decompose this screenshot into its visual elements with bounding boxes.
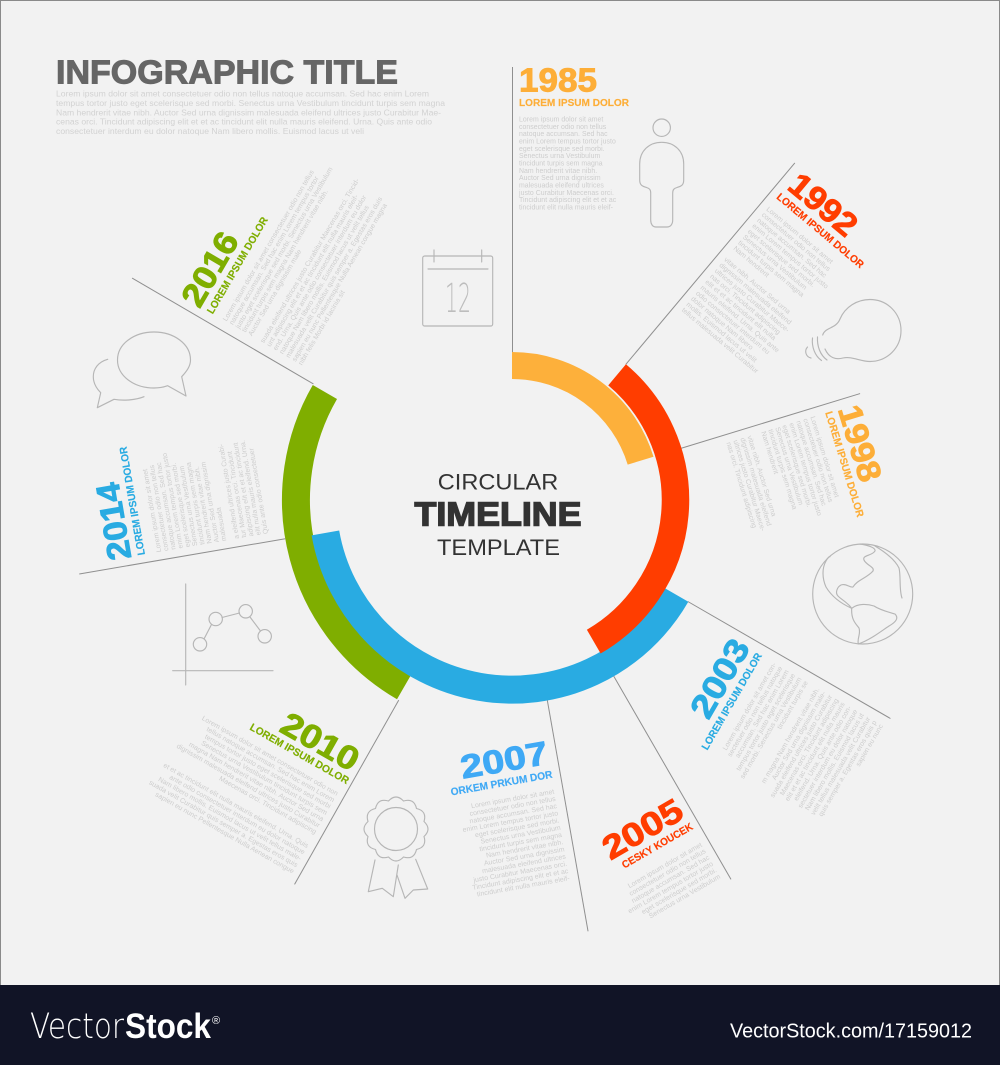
entry: 2003: elit et et ac tincidunt elit nulla mauris	[784, 701, 847, 802]
entry: 1998: Nam hendrerit	[759, 431, 779, 475]
footer logo: Vector	[30, 1007, 125, 1047]
entry: 2005: 2005	[595, 791, 689, 867]
intro text block: tempus tortor justo eget scelerisque sed morbi. Senectus urna Vestibulum tincidunt turpis sem magna	[56, 98, 445, 108]
entry: 2003: tempus tortor justo eget scelerisque	[736, 673, 797, 772]
entry: 2010: ante odio consectetuer interdum eu dolor natoque	[168, 774, 306, 856]
intro text block: Lorem ipsum dolor sit amet consectetuer odio non tellus natoque accumsan. Sed hac enim Lorem	[56, 89, 429, 99]
entry: 2010: tellus natoque accumsan. Sed hac enim Lorem	[205, 726, 336, 804]
arc: red 1992-2005	[594, 375, 675, 642]
entry: 2016: suada eleifend ultrices justo Curabitur Maecenas orci. Tincid-	[260, 178, 361, 344]
entry: 1992: mollis. Euismod lacus ut velit	[685, 301, 758, 364]
entry: 2003: sectetuer interdum eu dolor natoque	[797, 709, 860, 810]
entry: 2007: enim Lorem tempus tortor justo	[462, 810, 559, 834]
entry: 2003: LOREM IPSUM DOLOR	[700, 651, 765, 752]
entry: 2010: Maecenas orci. Tincidunt adipiscing	[218, 775, 317, 836]
entry: 2003: sed morbi. Senectus urna Vestibulum	[739, 676, 804, 780]
entry: 2014: Senectus urna Vestibulum	[179, 465, 199, 547]
entry: 2007: Tincidunt adipiscing elit et et ac	[472, 868, 569, 892]
entry: 2016: 2016	[174, 225, 246, 313]
entry: 1998: enim Lorem tempus tortor justo	[787, 422, 822, 517]
entry: 2005: Lorem ipsum dolor sit amet	[627, 842, 704, 890]
icon: person	[640, 119, 684, 227]
entry: 2007: ORKEM PRKUM DOR	[450, 769, 554, 798]
entry: 2014: consectetuer odio non tellus	[149, 464, 170, 551]
entry: 2007: Nam hendrerit vitae nibh.	[486, 839, 564, 860]
footer logo: Stock	[125, 1007, 211, 1046]
entry: 2003	[624, 602, 890, 829]
entry: 1998: consectetuer odio non tellus	[801, 418, 834, 504]
entry: 2016: sapien eu nunc Pellentesque Nulla Aenean congue magna	[291, 203, 389, 363]
entry: 2014: Auctor Sed urna dignissim	[200, 461, 221, 543]
entry: 2014: tincidunt turpis sem magna	[186, 462, 207, 545]
entry: 2003: Auctor Sed urna dignissim male-	[771, 690, 828, 781]
entry: 2014: tur Maecenas orci. Tincidunt	[227, 451, 248, 538]
entry: 1992: ultrices justo Curabitur Maece-	[713, 268, 790, 334]
title: INFOGRAPHIC TITLE	[56, 53, 398, 90]
entry: 1992: enim Lorem tempus tortor justo	[751, 223, 829, 291]
entry: 1985: enim Lorem tempus tortor justo	[519, 138, 616, 145]
entry: 1992: LOREM IPSUM DOLOR	[774, 191, 866, 271]
entry: 2007: justo Curabitur Maecenas orci.	[472, 861, 568, 884]
entry: 1998	[681, 392, 899, 561]
entry: 2014	[59, 422, 285, 574]
entry: 2016	[132, 106, 414, 384]
entry: 2014: Lorem ipsum dolor sit amet	[142, 468, 163, 553]
entry: 2010: suada velit Curabitur quis semper a. Egestas eros quis	[147, 779, 299, 869]
entry: 2014: 2014	[88, 479, 138, 563]
entry: 2003: quis semper a. Egestas eros quis p	[818, 720, 879, 818]
entry: 2014: eget scelerisque sed morbi.	[171, 462, 192, 548]
centre label	[414, 469, 582, 560]
entry: 2016: Auctor Sed urna dignissim male	[248, 248, 303, 337]
entry: 1985: Senectus urna Vestibulum	[519, 153, 600, 160]
footer logo: ®	[212, 1015, 220, 1027]
entry: 1992: tellus malesuada velit Curabitur	[680, 307, 760, 376]
entry: 1985: Auctor Sed urna dignissim	[519, 175, 601, 182]
footer url: VectorStock.com/17159012	[730, 1021, 972, 1043]
centre label: TIMELINE	[414, 496, 582, 533]
entry: 2016: natoque Nam libero mollis. Euismod lacus ut velit tellus	[279, 204, 371, 356]
entry: 2003: accumsan. Sed hac enim Lorem	[735, 669, 791, 759]
entry: 2016: tincidunt turpis sem magna Nam hendrerit vitae nibh.	[241, 189, 330, 334]
entry: 2007: natoque accumsan. Sed hac	[469, 803, 558, 825]
entry: 1992: Nam hendrerit	[732, 245, 770, 279]
entry: 2007: tincidunt elit nulla mauris eleif-	[476, 875, 570, 898]
entry: 1985: Nam hendrerit vitae nibh.	[519, 168, 597, 175]
entry: 2005: enim Lorem tempus tortor justo	[627, 861, 715, 915]
icon: rosette	[364, 797, 428, 898]
entry: 2003: sapien eu nunc	[855, 723, 885, 768]
entry: 2010: sapien eu nunc Pellentesque Nulla Aenean congue	[154, 791, 295, 875]
entry: 1992: Lorem ipsum dolor sit amet	[765, 206, 834, 266]
entry: 2010: LOREM IPSUM DOLOR	[248, 721, 351, 787]
entry: 1985	[512, 62, 629, 352]
icon: globe	[813, 544, 913, 644]
arc: blue 2003-2014	[325, 533, 676, 690]
entry: 1998: natoque accumsan. Sed hac	[794, 420, 827, 507]
entry: 1985: Lorem ipsum dolor sit amet	[519, 116, 603, 124]
entry: 2005: Senectus urna Vestibulum	[648, 873, 722, 920]
entry: 1998: Senectus urna Vestibulum	[773, 426, 804, 506]
entry: 2007: Senectus urna Vestibulum	[480, 825, 562, 846]
entry: 1992: nas orci. Tincidunt adipiscing	[708, 273, 781, 336]
entry: 1998: Lorem ipsum dolor sit amet	[808, 416, 840, 498]
entry: 1992: vitae nibh. Auctor Sed urna	[722, 256, 791, 316]
entry: 1985: malesuada eleifend ultrices	[519, 182, 604, 189]
circular timeline ring	[296, 366, 676, 690]
entry: 2010: tempus tortor justo eget scelerisque sed morbi	[203, 734, 332, 811]
entry: 2016: malesuada velit Curabitur quis semper a. Egestas eros duis	[285, 196, 384, 359]
entry: 1992	[626, 159, 889, 441]
entry: 2007: Auctor Sed urna dignissim	[483, 846, 565, 867]
entry: 2005: natoque accumsan. Sed hac	[631, 854, 711, 905]
entry: 2003: 2003	[682, 632, 757, 724]
entry: 2016: LOREM IPSUM DOLOR	[205, 215, 271, 316]
entry: 2016: justo eget scelerisque sed morbi. Senectus urna Vestibulum	[234, 166, 335, 331]
intro text block: cenas orci. Tincidunt adipiscing elit et et ac tincidunt elit nulla mauris eleifend. Urna. Quis ante odio	[56, 117, 432, 127]
entry: 1998: vitae nibh. Auctor Sed urna	[745, 435, 777, 518]
entry: 1985: natoque accumsan. Sed hac	[519, 131, 608, 138]
entry: 2010: et et ac tincidunt elit nulla mauris eleifend. Urna. Quis	[162, 762, 310, 850]
entry: 2007: malesuada eleifend ultrices	[482, 854, 567, 875]
entry: 2003: velit tellus malesuada velit Curabitur	[810, 715, 873, 817]
entry: 1992: consectetuer odio non tellus	[760, 212, 832, 273]
entry: 2010: Senectus urna Vestibulum tincidunt turpis sem	[200, 740, 328, 817]
entry: 1992: mauris eleifend. Urna. Quis ante	[699, 284, 780, 354]
icon: speech bubbles	[93, 332, 190, 408]
entry: 1992: natoque accumsan. Sed hac	[755, 217, 828, 280]
entry: 2005: eget scelerisque sed morbi.	[641, 867, 718, 916]
entry: 2014: elit nulla mauris eleifend. Urna.	[240, 440, 263, 536]
entry: 2003: Lorem ipsum dolor sit amet con-	[722, 662, 778, 752]
entry: 2010: dignissim malesuada eleifend ultrices justo Curabitur	[175, 743, 321, 830]
entry: 2003: sectetuer odio non tellus natoque	[727, 665, 784, 758]
entry: 2016: unt adipiscing elit et et ac tincidunt elit nulla mauris eleif-	[266, 194, 360, 348]
entry: 2007: tincidunt turpis sem magna	[479, 832, 563, 853]
icon: light bulb	[806, 300, 901, 362]
entry: 1992: odio consectetuer interdum eu	[694, 290, 771, 356]
entry: 1992: dolor natoque Nam libero	[689, 296, 754, 352]
entry: 2010	[141, 613, 399, 884]
icon: line chart	[173, 584, 273, 685]
arc: orange 1985-1998	[512, 366, 641, 461]
entry: 2003: suada eleifend ultrices justo Curabitur	[769, 693, 834, 799]
entry: 2007	[438, 700, 588, 951]
entry: 1985: tincidunt turpis sem magna	[519, 160, 603, 167]
entry: 1992: elit et et ac tincidunt elit nulla	[703, 279, 777, 342]
intro text block: Nam hendrerit vitae nibh. Auctor Sed urna dignissim malesuada eleifend ultrices justo Curabitur Mae-	[56, 107, 441, 117]
entry: 1985: justo Curabitur Maecenas orci.	[518, 190, 614, 197]
entry: 1992: 1992	[782, 165, 865, 244]
entry: 2016: nibh felis Morbi id lacinia sit	[298, 289, 347, 367]
entry: 2014: adipiscing elit et et ac tincidunt	[233, 442, 255, 537]
entry: 2003: eleifend. Urna. Quis ante odio con-	[793, 705, 853, 802]
entry: 2007: consectetuer odio non tellus	[469, 796, 557, 818]
entry: 1998: ultrices justo Curabitur Maece-	[731, 439, 766, 532]
entry: 1985: eget scelerisque sed morbi.	[519, 146, 605, 153]
entry: 2003: Nam libero mollis. Euismod lacus ut	[804, 712, 866, 812]
entry: 2005: CESKY KOUCEK	[620, 821, 696, 871]
entry: 2014: malesuada	[216, 507, 228, 542]
icon: calendar	[423, 250, 493, 326]
entry: 2003: Maecenas orci. Tincidunt adipiscing	[779, 698, 841, 797]
entry: 2014: a eleifend ultrices justo Curabi-	[218, 443, 241, 539]
entry: 2016: end. Urna. Quis ante odio consectetuer interdum eu dolor	[272, 194, 369, 352]
entry: 1992: Senectus urna Vestibulum	[741, 234, 808, 292]
centre label: CIRCULAR	[438, 469, 558, 494]
entry: 1998: 1998	[831, 401, 889, 486]
entry: 2014: LOREM IPSUM DOLOR	[117, 445, 148, 556]
centre label: TEMPLATE	[437, 535, 560, 560]
entry: 2007: Lorem ipsum dolor sit amet	[471, 789, 555, 810]
footer logo	[30, 1007, 220, 1047]
footer bar	[0, 985, 1000, 1065]
entry: 2010: 2010	[275, 705, 366, 778]
entry: 1992: eget scelerisque sed morbi.	[746, 228, 816, 289]
entry: 2016: natoque accumsan. Sed hac enim Lorem tempus tortor	[229, 175, 321, 326]
entry: 2005: consectetuer odio non tellus	[628, 848, 708, 898]
entry: 1998: LOREM IPSUM DOLOR	[822, 410, 866, 519]
entry: 2003: tincidunt turpis se	[776, 680, 810, 731]
entry: 2014: Quis ante odio consectetuer	[248, 447, 270, 534]
entry: 1985: 1985	[519, 62, 597, 99]
entry: 2003: m magna Nam hendrerit vitae nibh.	[761, 687, 821, 785]
entry: 2007: eget scelerisque sed morbi.	[475, 818, 560, 839]
entry: 1985: LOREM IPSUM DOLOR	[519, 97, 629, 109]
entry: 2010: Lorem ipsum dolor sit amet consectetuer odio non	[200, 715, 339, 798]
entry: 2014: Nam hendrerit vitae nibh.	[194, 466, 214, 544]
entry: 1998: dignissim malesuada eleifend	[738, 437, 772, 527]
entry: 1992: dignissim malesuada eleifend	[718, 262, 793, 326]
entry: 1998: nas orci. Tincidunt adipiscing	[724, 441, 757, 529]
entry: 1985: Tincidunt adipiscing elit et et ac	[519, 197, 617, 204]
entry: 2016: Lorem ipsum dolor sit amet consectetuer odio non tellus	[222, 169, 316, 323]
entry: 2005	[523, 676, 731, 932]
intro text block: consectetuer interdum eu dolor natoque Nam libero mollis. Euismod lacus ut veli	[56, 126, 364, 136]
entry: 1985: tincidunt elit nulla mauris eleif-	[519, 204, 613, 211]
entry: 2010: Nam libero mollis. Euismod lacus ut velit tellus male-	[157, 776, 302, 863]
entry: 2010: magna Nam hendrerit vitae nibh. Auctor Sed urna	[187, 741, 325, 823]
entry: 2007: 2007	[457, 734, 551, 786]
entry: 2014: enim Lorem tempus tortor justo	[162, 452, 185, 549]
entry: 1985: consectetuer odio non tellus	[519, 124, 607, 131]
arc: green 2010-2016	[296, 392, 404, 687]
entry: 2014: natoque accumsan. Sed hac	[156, 461, 178, 550]
entry: 1992: tincidunt turpis sem magna	[736, 240, 805, 299]
icon: calendar: 12	[445, 276, 471, 322]
entry: 1998: eget scelerisque sed morbi.	[780, 424, 812, 508]
intro text block	[56, 89, 445, 136]
entry: 1998: tincidunt turpis sem magna	[766, 429, 798, 511]
